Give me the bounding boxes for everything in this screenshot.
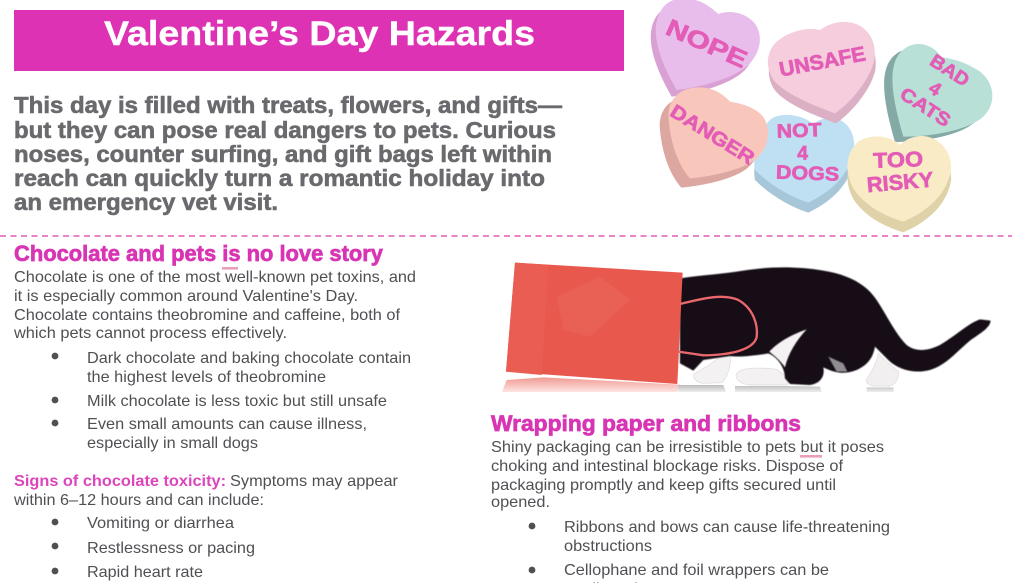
chocolate bullet list: Milk chocolate is less toxic but still unsafe <box>87 393 387 410</box>
chocolate bullet list: Even small amounts can cause illness, <box>87 416 367 433</box>
heart: bad 4 cats: BAD <box>926 50 973 91</box>
intro paragraph: but they can pose real dangers to pets. Curious <box>14 117 556 143</box>
red bag <box>506 263 683 384</box>
wrapping bullet list: Cellophane and foil wrappers can be <box>564 562 829 579</box>
signs of toxicity intro: Signs of chocolate toxicity: <box>14 473 226 490</box>
grammar underline on is <box>222 267 238 270</box>
white belly fleck <box>828 357 847 372</box>
heart: danger <box>660 87 768 188</box>
white chest patch <box>769 329 807 367</box>
wrapping paragraph: Shiny packaging can be irresistible to pets but it poses <box>491 439 884 456</box>
conversation hearts illustration <box>651 0 992 232</box>
chocolate bullet list: the highest levels of theobromine <box>87 369 326 386</box>
signs of toxicity intro: Symptoms may appear <box>230 473 399 490</box>
floor reflection of paws <box>678 385 894 392</box>
bag handle <box>678 297 757 355</box>
wrapping paragraph: packaging promptly and keep gifts secured until <box>491 477 836 494</box>
intro paragraph: reach can quickly turn a romantic holiday into <box>14 165 545 191</box>
heart: unsafe: UNSAFE <box>777 42 867 82</box>
title banner <box>14 10 624 71</box>
heart: nope: NOPE <box>662 14 751 74</box>
symptoms bullet list <box>52 515 255 581</box>
chocolate paragraph: Chocolate is one of the most well-known pet toxins, and <box>14 269 416 286</box>
intro paragraph: an emergency vet visit. <box>14 189 278 215</box>
grammar underline on but <box>800 455 822 458</box>
section divider <box>0 235 1012 237</box>
wrapping bullet list: obstructions <box>564 538 652 555</box>
chocolate bullet list: Dark chocolate and baking chocolate contain <box>87 350 411 367</box>
heart: too risky: RISKY <box>866 167 934 197</box>
title banner: Valentine’s Day Hazards <box>104 15 535 53</box>
chocolate paragraph: it is especially common around Valentine's Day. <box>14 288 358 305</box>
heading: chocolate: Chocolate and pets is no love story <box>14 241 384 266</box>
intro paragraph <box>14 92 562 215</box>
chocolate paragraph: which pets cannot process effectively. <box>13 325 287 342</box>
heart: bad 4 cats: CATS <box>896 83 955 131</box>
heading: wrapping paper: Wrapping paper and ribbons <box>491 411 801 436</box>
heart: danger: DANGER <box>666 101 758 169</box>
wrapping paragraph <box>491 439 884 511</box>
photo: cat in red gift bag <box>502 263 991 392</box>
chocolate bullet list: especially in small dogs <box>87 435 258 452</box>
white hind leg <box>866 353 899 386</box>
heart: too risky: TOO <box>873 147 923 173</box>
white front paw <box>694 356 731 383</box>
white second paw <box>736 368 788 385</box>
chocolate paragraph <box>13 269 416 342</box>
symptoms bullet list: Vomiting or diarrhea <box>87 515 234 532</box>
bag reflection <box>502 377 680 392</box>
chocolate bullet list <box>52 350 411 452</box>
wrapping paragraph: opened. <box>491 494 550 511</box>
symptoms bullet list: Restlessness or pacing <box>87 540 255 557</box>
wrapping bullet list: Ribbons and bows can cause life-threatening <box>564 519 890 536</box>
heart: not 4 dogs <box>754 115 854 213</box>
intro paragraph: This day is filled with treats, flowers, and gifts— <box>14 92 562 118</box>
heart: nope <box>651 0 760 97</box>
wrapping paragraph: choking and intestinal blockage risks. Dispose of <box>491 458 844 475</box>
heart: bad 4 cats: 4 <box>925 77 946 101</box>
heart: unsafe <box>768 22 876 123</box>
signs of toxicity intro <box>13 473 399 509</box>
wrapping bullet list <box>529 519 890 583</box>
heart: not 4 dogs: DOGS <box>776 163 840 186</box>
chocolate paragraph: Chocolate contains theobromine and caffeine, both of <box>14 307 401 324</box>
symptoms bullet list: Rapid heart rate <box>87 564 203 581</box>
signs of toxicity intro: within 6–12 hours and can include: <box>13 492 264 509</box>
intro paragraph: noses, counter surfing, and gift bags left within <box>14 141 552 167</box>
cat body <box>680 267 991 385</box>
heart: too risky <box>847 136 951 232</box>
heart: not 4 dogs: NOT <box>776 120 822 143</box>
heart: bad 4 cats <box>884 44 992 142</box>
heart: not 4 dogs: 4 <box>797 143 808 164</box>
